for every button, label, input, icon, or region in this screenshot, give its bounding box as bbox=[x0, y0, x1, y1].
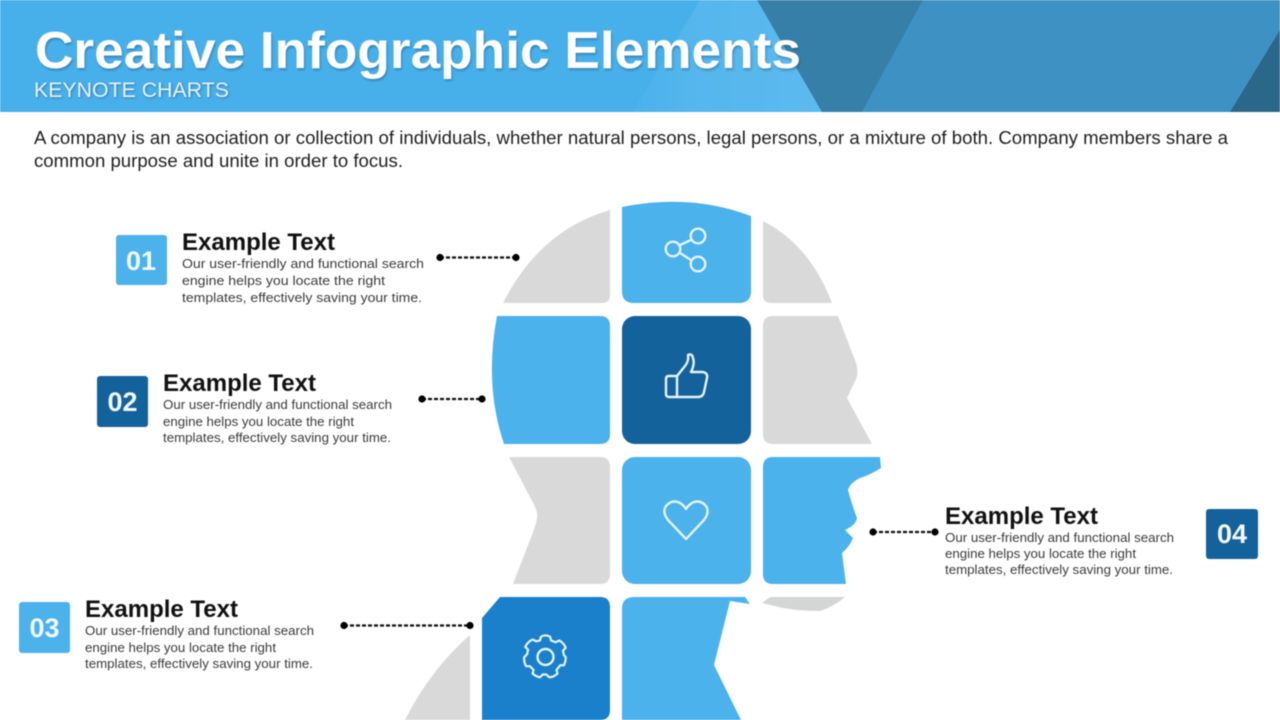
description 02: Our user-friendly and functional search bbox=[163, 397, 392, 412]
intro text: A company is an association or collection of individuals, whether natural persons, legal persons, or a mixture of both. Company members share a bbox=[34, 128, 1229, 148]
callout 03 bbox=[19, 596, 474, 671]
tile: face profile bbox=[763, 457, 881, 584]
heading 04: Example Text bbox=[945, 503, 1098, 530]
badge 03 bbox=[19, 602, 70, 653]
description 02: templates, effectively saving your time. bbox=[163, 430, 391, 445]
badge 02: 02 bbox=[107, 387, 138, 417]
callout 04 bbox=[869, 503, 1258, 577]
tile: heart bbox=[622, 457, 751, 584]
icon: thumbs up bbox=[666, 354, 707, 397]
heading 02: Example Text bbox=[163, 370, 316, 397]
subtitle: KEYNOTE CHARTS bbox=[34, 79, 229, 102]
heading 01: Example Text bbox=[182, 229, 335, 256]
tile: top right gray bbox=[763, 221, 832, 303]
badge 01: 01 bbox=[126, 246, 156, 276]
description 03: engine helps you locate the right bbox=[85, 640, 276, 655]
callout 02 bbox=[97, 370, 486, 445]
description 04: templates, effectively saving your time. bbox=[945, 562, 1173, 577]
description 01: engine helps you locate the right bbox=[182, 273, 385, 288]
header banner bbox=[0, 0, 1280, 112]
badge 04: 04 bbox=[1217, 519, 1247, 549]
tile: bottom neck blue bbox=[622, 597, 750, 720]
tile: chin gray bbox=[762, 597, 845, 611]
tile: share bbox=[622, 202, 751, 303]
description 02: engine helps you locate the right bbox=[163, 414, 354, 429]
description 01 bbox=[182, 256, 424, 305]
tile: right gray bbox=[763, 316, 872, 444]
description 04: Our user-friendly and functional search bbox=[945, 530, 1174, 545]
badge 02 bbox=[97, 376, 148, 427]
tile: thumbs up bbox=[622, 316, 751, 444]
connector 01 bbox=[436, 254, 520, 261]
heading 03: Example Text bbox=[85, 596, 238, 623]
description 04 bbox=[945, 530, 1174, 577]
head graphic bbox=[405, 202, 881, 720]
tile: top left gray bbox=[503, 210, 610, 303]
tile: shoulder gray bbox=[405, 635, 470, 720]
description 01: templates, effectively saving your time. bbox=[182, 290, 422, 305]
tile: left neck gray bbox=[509, 457, 610, 584]
callout 01 bbox=[116, 229, 520, 305]
tile: gear bbox=[482, 597, 610, 720]
badge 04 bbox=[1206, 509, 1258, 559]
tile: left blue bbox=[492, 316, 610, 444]
description 04: engine helps you locate the right bbox=[945, 546, 1136, 561]
icon: gear bbox=[524, 635, 566, 677]
badge 03: 03 bbox=[29, 613, 60, 643]
intro text: common purpose and unite in order to focus. bbox=[34, 151, 403, 171]
connector 03 bbox=[340, 622, 474, 629]
title: Creative Infographic Elements bbox=[35, 22, 801, 80]
badge 01 bbox=[116, 235, 167, 285]
connector 04 bbox=[869, 528, 939, 536]
intro text bbox=[34, 128, 1229, 171]
description 03: Our user-friendly and functional search bbox=[85, 623, 314, 638]
description 03: templates, effectively saving your time. bbox=[85, 656, 313, 671]
icon: heart bbox=[664, 502, 708, 539]
description 02 bbox=[163, 397, 392, 445]
connector 02 bbox=[418, 395, 486, 403]
icon: share bbox=[666, 229, 705, 271]
description 03 bbox=[85, 623, 314, 671]
description 01: Our user-friendly and functional search bbox=[182, 256, 424, 271]
